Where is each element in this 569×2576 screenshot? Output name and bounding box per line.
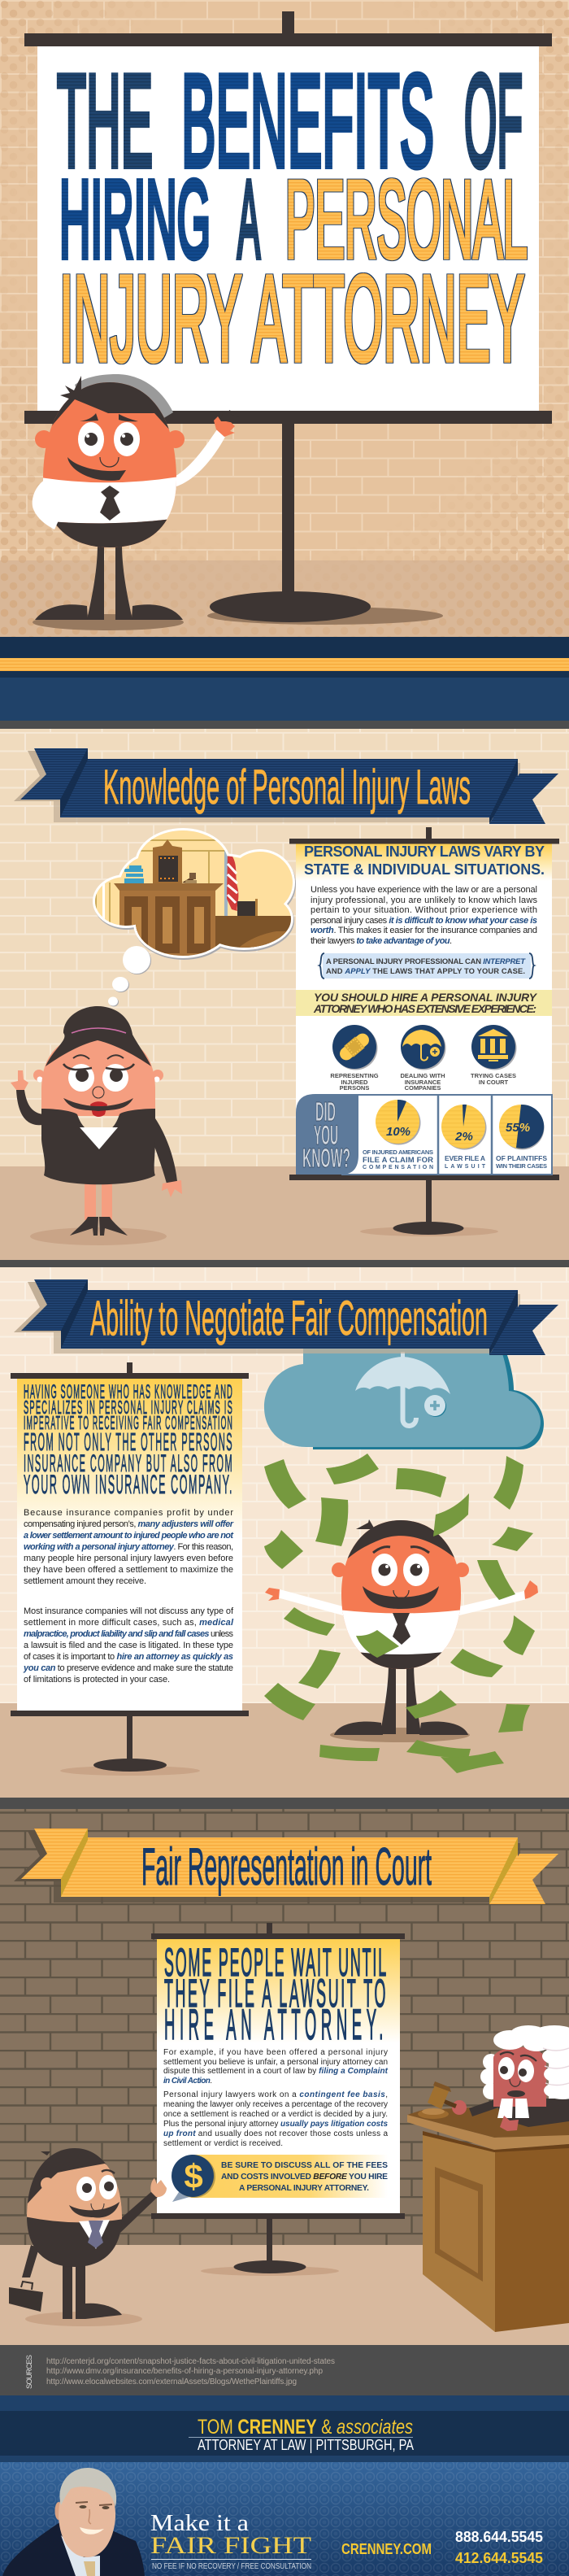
did you know panel xyxy=(296,1094,552,1175)
sources panel xyxy=(0,2345,569,2395)
banner: fair representation xyxy=(14,1828,558,1904)
body text: meaning the lawyer only receives a percentage of the recovery xyxy=(163,2100,388,2109)
callout: interpret and apply: AND APPLY THE LAWS THAT APPLY TO YOUR CASE. xyxy=(326,966,525,975)
header divider band xyxy=(0,637,569,729)
slogan xyxy=(150,2510,311,2571)
body text: pertain to your situation. Without prior experience with xyxy=(311,905,537,915)
body text: settlement in more difficult cases, such as, medical xyxy=(24,1618,234,1628)
banner: knowledge xyxy=(14,748,558,824)
title xyxy=(57,48,528,387)
firm name: TOM CRENNEY & associates xyxy=(198,2416,413,2439)
icon labels: INJURED xyxy=(341,1079,368,1086)
did you know heading: YOU xyxy=(314,1120,338,1151)
body text xyxy=(23,1508,234,1685)
icon labels: PERSONS xyxy=(340,1084,369,1092)
body text xyxy=(311,885,538,946)
section 3: ability to negotiate fair compensation: IMPERATIVE TO RECEIVING FAIR COMPENSATION xyxy=(24,1412,233,1433)
phone numbers: 412.644.5545 xyxy=(455,2550,543,2566)
body text: of cases it is important to hire an attorney as quickly as xyxy=(24,1652,233,1662)
icon: umbrella xyxy=(355,1352,450,1426)
pie chart: 2 percent: EVER FILE A xyxy=(445,1154,485,1162)
did you know heading xyxy=(302,1096,350,1173)
info board: court xyxy=(151,1923,405,2276)
body text: their lawyers to take advantage of you. xyxy=(311,936,452,946)
title: THE xyxy=(57,48,153,194)
section 2: knowledge of personal injury laws xyxy=(0,729,569,1267)
callout: discuss fees: A PERSONAL INJURY ATTORNEY. xyxy=(239,2184,369,2193)
character: lawyer with briefcase xyxy=(9,2146,167,2326)
body text: settlement or verdict is received. xyxy=(163,2139,283,2148)
pie chart: 2 percent: 2% xyxy=(454,1130,473,1144)
judge figure xyxy=(452,2025,569,2131)
body text: a lower settlement amount to injured people who are not xyxy=(24,1531,234,1541)
body text: of limitations is protected in your case. xyxy=(24,1675,170,1685)
body text: Unless you have experience with the law or are a personal xyxy=(311,885,537,895)
pie chart: 2 percent: LAWSUIT xyxy=(445,1164,486,1170)
pie chart: 55 percent: OF PLAINTIFFS xyxy=(496,1154,547,1162)
body text: malpractice, product liability and slip and fall cases unless xyxy=(24,1629,234,1639)
pie chart: 10 percent xyxy=(363,1100,433,1170)
board heading xyxy=(24,1381,233,1499)
phone numbers: 888.644.5545 xyxy=(455,2529,543,2545)
callout: discuss fees: AND COSTS INVOLVED BEFORE YOU HIRE xyxy=(221,2173,388,2182)
body text: you can to preserve evidence and make sure the statute xyxy=(23,1663,233,1673)
falling money bills xyxy=(264,1454,535,1773)
body text: many people hire personal injury lawyers even before xyxy=(24,1554,233,1563)
projector screen with title xyxy=(24,11,552,625)
character: man with money xyxy=(265,1513,538,1742)
icon labels: REPRESENTING xyxy=(330,1072,379,1079)
section 3: ability to negotiate fair compensation: YOUR OWN INSURANCE COMPANY. xyxy=(24,1470,233,1499)
icon labels: INSURANCE xyxy=(405,1079,441,1086)
slogan: FAIR FIGHT xyxy=(150,2532,311,2559)
board heading xyxy=(164,1942,388,2049)
callout: interpret and apply: A PERSONAL INJURY PROFESSIONAL CAN INTERPRET xyxy=(326,957,526,965)
body text: injury professional, you are unlikely to know which laws xyxy=(311,896,538,905)
subheading strip: YOU SHOULD HIRE A PERSONAL INJURY xyxy=(314,991,538,1004)
phone numbers xyxy=(455,2529,543,2566)
icon: dollar speech bubble: $ xyxy=(184,2157,203,2195)
section 1: hero xyxy=(0,0,569,637)
gavel xyxy=(418,2081,457,2119)
slogan: Make it a xyxy=(150,2510,249,2536)
body text: Plus the personal injury attorney usually pays litigation costs xyxy=(163,2120,388,2129)
body text: in Civil Action. xyxy=(163,2077,212,2086)
pie chart: 55 percent: WIN THEIR CASES xyxy=(496,1162,547,1170)
source urls: http://centerjd.org/content/snapshot-justice-facts-about-civil-litigation-united-states xyxy=(46,2357,335,2366)
body text: a lawsuit is filed and the case is litigated. In these type xyxy=(24,1641,233,1650)
character: man waving xyxy=(33,374,240,630)
section 3: ability to negotiate fair compensation: SPECIALIZES IN PERSONAL INJURY CLAIMS IS xyxy=(24,1397,233,1418)
board heading xyxy=(304,843,545,878)
title: A xyxy=(237,158,260,281)
icon: bandage xyxy=(332,1025,377,1070)
body text: settlement you believe is unfair, a personal injury attorney can xyxy=(163,2058,388,2067)
body text: settlement amount they receive. xyxy=(24,1576,146,1586)
info board: negotiate xyxy=(11,1362,249,1776)
website: CRENNEY.COM xyxy=(341,2541,432,2557)
body text: personal injury cases it is difficult to know what your case is xyxy=(311,916,537,926)
body text: Most insurance companies will not discuss any type of xyxy=(24,1606,234,1616)
pie chart: 10 percent: COMPENSATION xyxy=(363,1165,433,1170)
body text: For example, if you have been offered a personal injury xyxy=(163,2048,388,2057)
icon: dollar speech bubble xyxy=(172,2155,215,2202)
banner: negotiate xyxy=(14,1279,558,1355)
section 3: ability to negotiate fair compensation xyxy=(0,1267,569,1809)
body text: compensating injured person’s, many adjusters will offer xyxy=(24,1519,234,1529)
icon: courthouse xyxy=(471,1025,517,1070)
source urls: http://www.dmv.org/insurance/benefits-of-hiring-a-personal-injury-attorney.php xyxy=(46,2367,323,2376)
pie chart: 55 percent: 55% xyxy=(506,1121,530,1135)
source urls: http://www.elocalwebsites.com/externalAssets/Blogs/WethePlaintiffs.jpg xyxy=(46,2378,297,2386)
firm subtitle: ATTORNEY AT LAW | PITTSBURGH, PA xyxy=(198,2437,414,2453)
slogan: NO FEE IF NO RECOVERY / FREE CONSULTATION xyxy=(152,2562,311,2571)
body text: Personal injury lawyers work on a contingent fee basis, xyxy=(163,2090,388,2099)
info board: personal injury laws xyxy=(289,827,559,1236)
thought bubble: courtroom xyxy=(93,828,296,1007)
pie chart: 10 percent: FILE A CLAIM FOR xyxy=(363,1156,433,1165)
board heading: STATE & INDIVIDUAL SITUATIONS. xyxy=(304,861,545,878)
character: woman xyxy=(11,1006,182,1245)
icon labels: COMPANIES xyxy=(405,1084,441,1092)
cloud with umbrella xyxy=(264,1346,544,1449)
title: HIRING xyxy=(59,158,211,281)
footer call to action xyxy=(0,2462,569,2576)
source urls xyxy=(46,2357,335,2386)
subheading strip: ATTORNEY WHO HAS EXTENSIVE EXPERIENCE: xyxy=(313,1002,536,1015)
body text xyxy=(163,2048,389,2148)
icon labels: TRYING CASES xyxy=(471,1072,516,1079)
callout: interpret and apply xyxy=(319,953,534,979)
pie chart: 2 percent xyxy=(441,1105,486,1170)
icon labels xyxy=(330,1072,516,1092)
body text: once a settlement is reached or a verdict is decided by a jury. xyxy=(163,2110,388,2119)
judge bench and judge xyxy=(407,2025,569,2332)
body text: worth. This makes it easier for the insurance companies and xyxy=(311,926,537,935)
section 3: ability to negotiate fair compensation: HAVING SOMEONE WHO HAS KNOWLEDGE AND xyxy=(24,1381,233,1403)
callout: discuss fees: BE SURE TO DISCUSS ALL OF THE FEES xyxy=(221,2161,388,2170)
body text: dispute this settlement in a court of law by filing a Complaint xyxy=(163,2067,389,2076)
body text: they have been offered a settlement to maximize the xyxy=(24,1565,233,1575)
did you know panel: KNOW? xyxy=(302,1143,350,1173)
section 4: fair representation in court xyxy=(0,1809,569,2345)
icon labels: DEALING WITH xyxy=(400,1072,445,1079)
attorney portrait xyxy=(2,2468,145,2576)
subheading strip xyxy=(296,990,552,1016)
body text: working with a personal injury attorney. For this reason, xyxy=(24,1542,233,1552)
icon labels: IN COURT xyxy=(479,1079,509,1086)
body text: Because insurance companies profit by under xyxy=(24,1508,233,1518)
pie chart: 55 percent xyxy=(496,1105,547,1170)
body text: up front and usually does not recover those costs unless a xyxy=(163,2129,388,2138)
sources label: SOURCES xyxy=(25,2355,34,2389)
law firm header band xyxy=(0,2395,569,2462)
board heading: PERSONAL INJURY LAWS VARY BY xyxy=(304,843,545,860)
icon: umbrella xyxy=(401,1025,445,1070)
callout: discuss fees xyxy=(172,2155,388,2202)
did you know heading: DID xyxy=(315,1096,336,1127)
pie chart: 10 percent: OF INJURED AMERICANS xyxy=(363,1149,433,1156)
pie chart: 10 percent: 10% xyxy=(386,1125,410,1139)
